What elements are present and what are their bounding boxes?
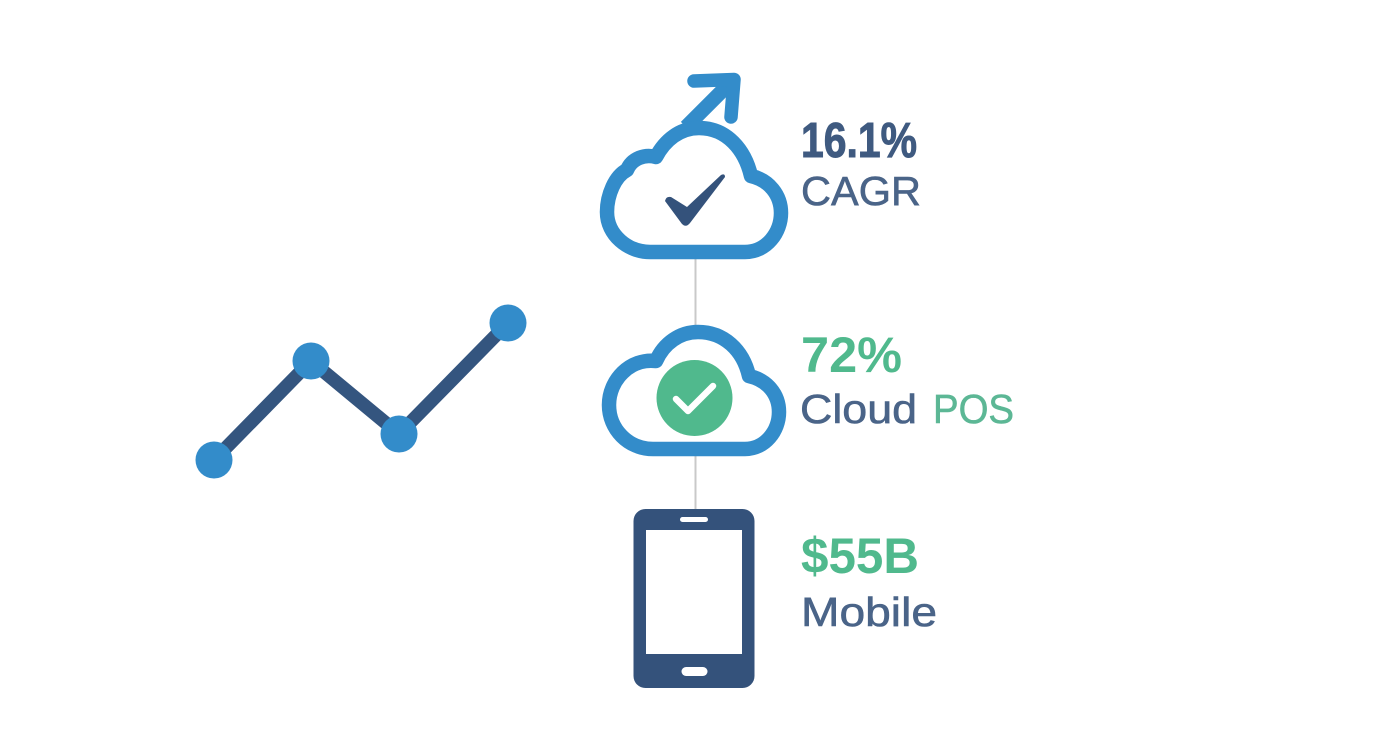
icon: dark check mark (665, 174, 725, 226)
icon: white check mark (676, 386, 713, 411)
connector: cloud to phone (694, 454, 696, 511)
text: 72% Cloud POS (800, 327, 1014, 432)
line chart (196, 304, 526, 478)
text: 16.1% CAGR (801, 114, 921, 214)
text: 16.1% CAGR: CAGR (801, 168, 921, 214)
phone screen (646, 530, 742, 654)
icon: cloud with check (607, 128, 781, 252)
connector: cloud to cloud (694, 258, 696, 327)
icon: cloud with green badge (609, 332, 779, 449)
text: 72% Cloud POS: Cloud (800, 386, 917, 432)
text: $55B Mobile: $55B (801, 528, 919, 584)
icon: green check badge (656, 360, 732, 436)
icon: growth arrow (686, 80, 734, 127)
phone home button (682, 667, 708, 676)
text: 16.1% CAGR: 16.1% (801, 114, 917, 168)
icon: mobile phone (634, 509, 754, 688)
text: 72% Cloud POS: 72% (801, 327, 902, 383)
text: $55B Mobile (801, 528, 937, 635)
text: $55B Mobile: Mobile (801, 589, 937, 635)
text: 72% Cloud POS: POS (933, 386, 1014, 432)
phone speaker (680, 517, 708, 522)
